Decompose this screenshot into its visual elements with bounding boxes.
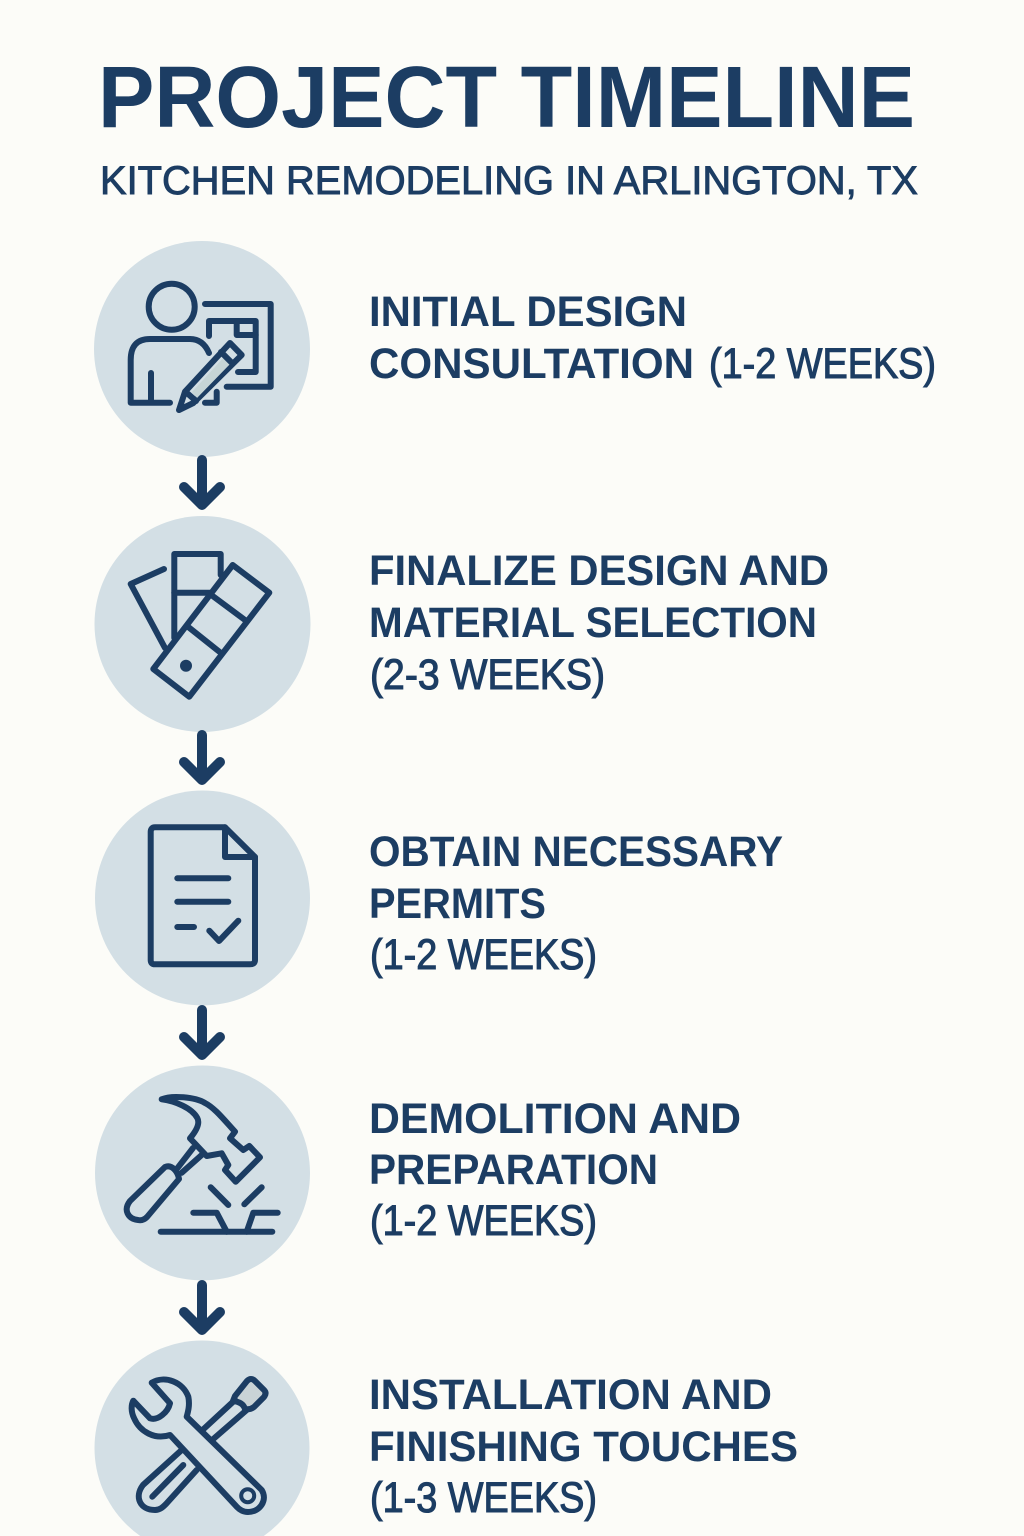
step 2 label: FINALIZE DESIGN AND xyxy=(369,547,829,595)
step 4 label: (1-2 WEEKS) xyxy=(370,1197,597,1245)
step 5 label: FINISHING TOUCHES xyxy=(369,1423,798,1471)
step 2 label: (2-3 WEEKS) xyxy=(370,651,605,699)
arrow 2 to 3 xyxy=(184,735,220,780)
arrow 4 to 5 xyxy=(184,1285,220,1330)
step 3 label xyxy=(369,828,783,979)
icon: permit document with check xyxy=(151,827,255,964)
step 1 label xyxy=(369,288,936,388)
icon: material swatch fan xyxy=(131,554,269,697)
step 5: installation and finishing touches xyxy=(94,1340,798,1536)
step 1 label: (1-2 WEEKS) xyxy=(709,340,936,388)
step 1 label: CONSULTATION xyxy=(369,340,694,388)
step 4 label xyxy=(369,1095,741,1245)
title: PROJECT TIMELINE xyxy=(98,49,915,146)
icon: crossed wrench and screwdriver xyxy=(132,1379,266,1512)
step 4 circle xyxy=(95,1066,310,1280)
step 3: obtain necessary permits xyxy=(95,790,783,1006)
step 4: demolition and preparation xyxy=(95,1066,741,1280)
step 3 label: PERMITS xyxy=(369,880,546,928)
step 2 label xyxy=(369,547,829,699)
step 3 circle xyxy=(95,790,310,1006)
step 1 circle xyxy=(94,241,310,457)
arrow 3 to 4 xyxy=(184,1010,220,1055)
icon: hammer striking floor xyxy=(127,1097,278,1232)
step 2 label: MATERIAL SELECTION xyxy=(369,599,817,647)
subtitle: KITCHEN REMODELING IN ARLINGTON, TX xyxy=(100,159,918,203)
step 1: initial design consultation xyxy=(94,241,936,457)
step 5 circle xyxy=(94,1340,310,1536)
step 3 label: (1-2 WEEKS) xyxy=(370,931,597,979)
step 5 label: (1-3 WEEKS) xyxy=(370,1474,597,1522)
step 4 label: PREPARATION xyxy=(369,1146,658,1194)
step 2 circle xyxy=(94,516,310,732)
step 1 label: INITIAL DESIGN xyxy=(369,288,687,336)
step 5 label xyxy=(369,1371,798,1522)
step 5 label: INSTALLATION AND xyxy=(369,1371,772,1419)
step 2: finalize design and material selection xyxy=(94,516,829,732)
icon: designer with plan and pencil xyxy=(131,284,271,410)
arrow 1 to 2 xyxy=(184,460,220,505)
step 4 label: DEMOLITION AND xyxy=(369,1095,741,1143)
step 3 label: OBTAIN NECESSARY xyxy=(369,828,783,876)
